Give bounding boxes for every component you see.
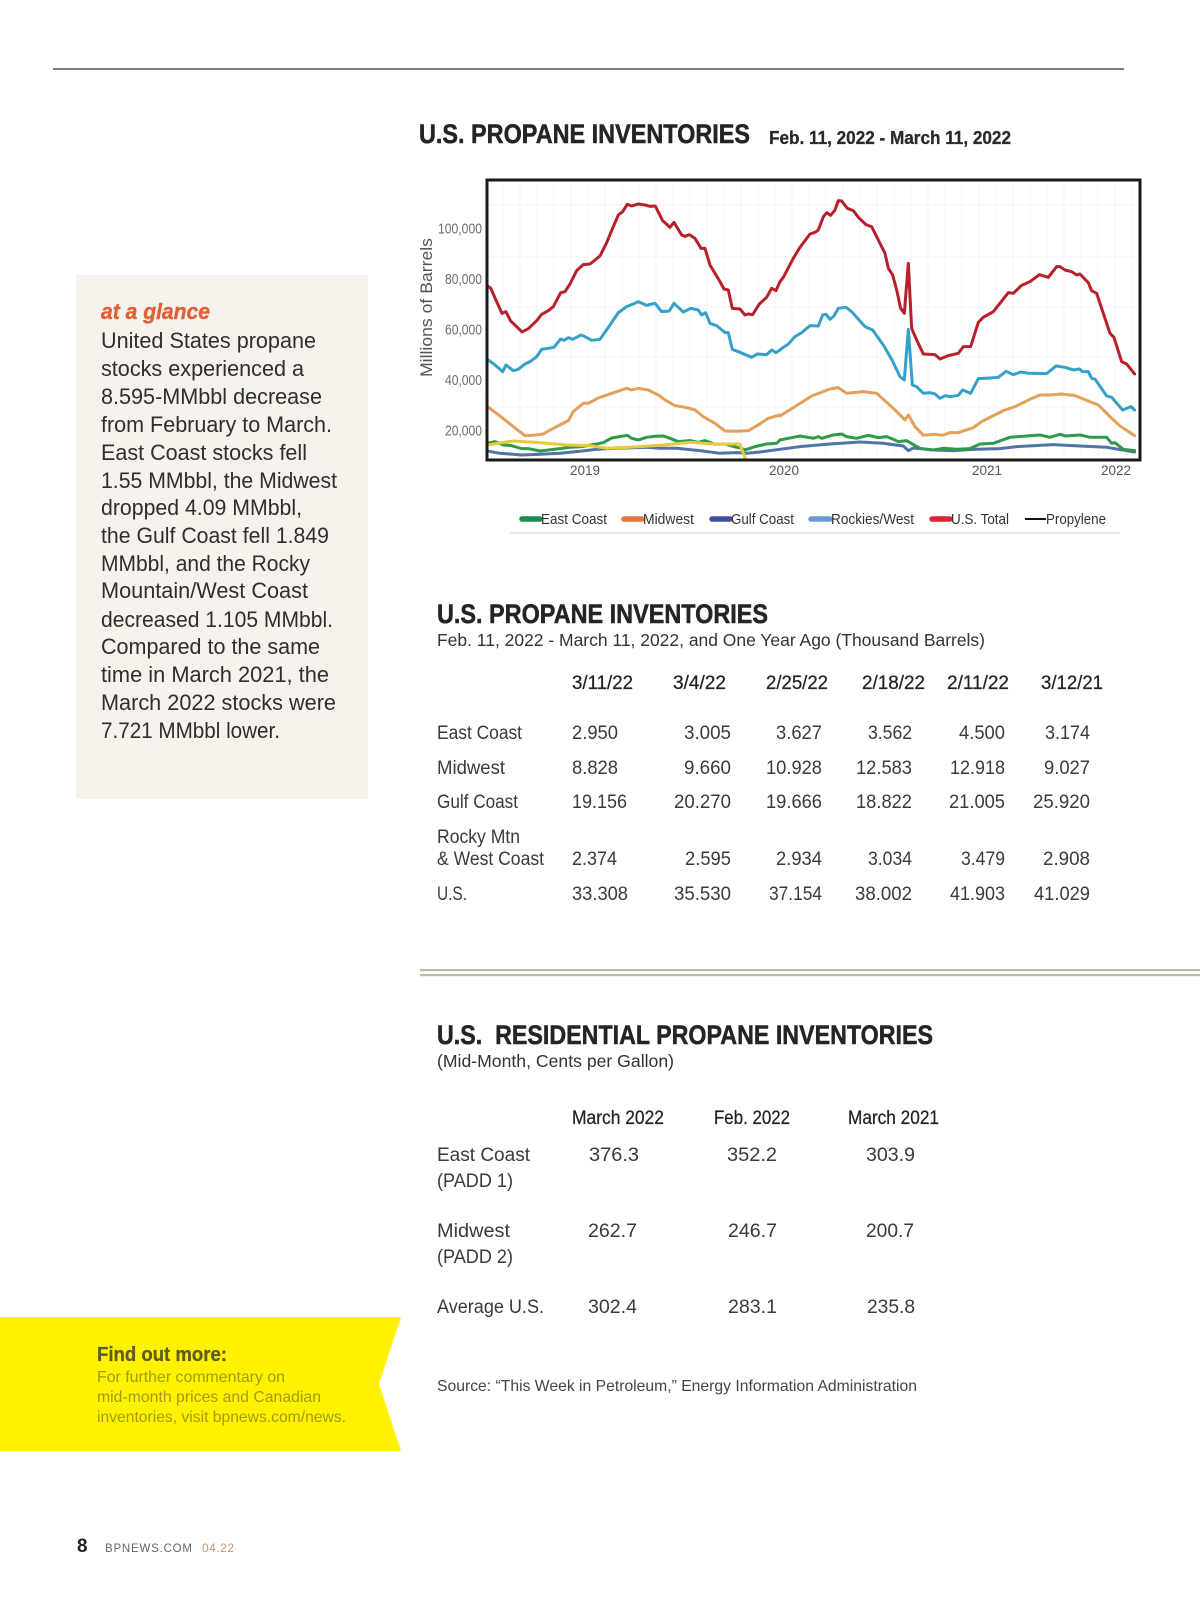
row: East Coast: 2.950: [572, 723, 618, 744]
row: Rocky Mtn and West Coast: [437, 827, 1090, 870]
heading: residential table: (Mid-Month, Cents per Gallon): [437, 1051, 674, 1071]
line: East Coast (green): [487, 434, 1135, 451]
line: U.S. total (red): [487, 201, 1135, 374]
line: Rockies/West (blue): [487, 302, 1135, 410]
row: Midwest: 9.660: [684, 758, 731, 779]
text block: sidebar summary: decreased 1.105 MMbbl.: [101, 607, 333, 632]
table header row: [572, 673, 1103, 694]
row: U.S.: U.S.: [437, 884, 467, 905]
heading: inventories table: [437, 599, 985, 650]
row: Midwest: 12.918: [950, 758, 1005, 779]
text block: sidebar summary: Compared to the same: [101, 634, 320, 659]
x axis labels: 2021: [972, 463, 1002, 478]
text block: sidebar summary: from February to March.: [101, 412, 332, 437]
chart legend: East Coast: [541, 512, 607, 528]
table header row: 3/11/22: [572, 673, 633, 694]
row: East Coast: East Coast: [437, 723, 523, 744]
row: U.S.: 38.002: [855, 884, 912, 905]
row: Rocky Mtn and West Coast: 2.908: [1043, 849, 1090, 870]
x axis labels: 2020: [769, 463, 799, 478]
chart frame: [487, 180, 1140, 460]
y axis labels: 80,000: [445, 271, 482, 288]
row: Gulf Coast: 25.920: [1033, 792, 1090, 813]
text block: sidebar summary: [101, 328, 337, 743]
line chart: propane inventories by region: [418, 180, 1140, 533]
callout: find out more banner: mid-month prices and Canadian: [97, 1389, 321, 1406]
chart legend: [510, 512, 1120, 533]
row: Rocky Mtn and West Coast: & West Coast: [437, 849, 545, 870]
row: Rocky Mtn and West Coast: 3.479: [961, 849, 1005, 870]
row: East Coast PADD 1: 303.9: [866, 1145, 915, 1166]
text block: sidebar summary: stocks experienced a: [101, 356, 305, 381]
row: Gulf Coast: 20.270: [674, 792, 731, 813]
table header row: 3/12/21: [1041, 673, 1103, 694]
row: Midwest: 10.928: [766, 758, 822, 779]
callout: find out more banner: For further commentary on: [97, 1369, 285, 1386]
table header row: 3/4/22: [673, 673, 726, 694]
row: U.S.: 35.530: [674, 884, 731, 905]
text block: sidebar summary: 8.595-MMbbl decrease: [101, 384, 322, 409]
row: East Coast PADD 1: 352.2: [727, 1145, 777, 1166]
heading: chart title: U.S. PROPANE INVENTORIES: [419, 119, 750, 149]
row: Average U.S.: 283.1: [728, 1297, 777, 1318]
row: Average U.S.: [437, 1297, 915, 1318]
row: Average U.S.: Average U.S.: [437, 1297, 544, 1318]
row: Midwest: Midwest: [437, 758, 506, 779]
row: Midwest PADD 2: 200.7: [866, 1221, 914, 1242]
chart legend: Midwest: [643, 512, 694, 528]
row: U.S.: [437, 884, 1090, 905]
x axis labels: 2019: [570, 463, 600, 478]
row: Midwest: 9.027: [1044, 758, 1090, 779]
residential header row: [572, 1108, 939, 1129]
y axis labels: 60,000: [445, 322, 482, 338]
row: Midwest PADD 2: (PADD 2): [437, 1247, 513, 1268]
row: East Coast: 3.174: [1045, 723, 1090, 744]
row: Gulf Coast: 18.822: [856, 792, 912, 813]
heading: chart title: [419, 119, 1011, 149]
residential header row: Feb. 2022: [714, 1108, 790, 1129]
row: U.S.: 41.903: [950, 884, 1005, 905]
chart legend: Gulf Coast: [731, 512, 794, 528]
row: East Coast PADD 1: 376.3: [589, 1145, 639, 1166]
callout: find out more banner: Find out more:: [97, 1344, 227, 1366]
row: Midwest PADD 2: Midwest: [437, 1221, 511, 1242]
y axis labels: [438, 220, 482, 440]
table: propane inventories: [437, 673, 1103, 905]
row: U.S.: 41.029: [1034, 884, 1090, 905]
row: Gulf Coast: 21.005: [949, 792, 1005, 813]
chart legend: U.S. Total: [951, 512, 1009, 528]
callout: find out more banner: [0, 1317, 401, 1451]
text block: sidebar summary: Mountain/West Coast: [101, 578, 308, 603]
row: East Coast: 3.562: [868, 723, 912, 744]
text block: sidebar summary: time in March 2021, the: [101, 662, 329, 687]
heading: inventories table: U.S. PROPANE INVENTORIES: [437, 599, 768, 629]
line: Midwest (orange): [487, 388, 1135, 436]
row: East Coast PADD 1: (PADD 1): [437, 1171, 513, 1192]
row: Midwest: [437, 758, 1090, 779]
chart lines: [487, 201, 1135, 462]
row: East Coast: 3.005: [684, 723, 731, 744]
row: Rocky Mtn and West Coast: 3.034: [868, 849, 912, 870]
row: U.S.: 37.154: [769, 884, 822, 905]
text block: sidebar summary: dropped 4.09 MMbbl,: [101, 495, 302, 520]
row: East Coast: 3.627: [776, 723, 822, 744]
callout: find out more banner: inventories, visit bpnews.com/news.: [97, 1409, 346, 1426]
row: Average U.S.: 302.4: [588, 1297, 637, 1318]
x axis labels: 2022: [1101, 463, 1131, 478]
text block: sidebar summary: 1.55 MMbbl, the Midwest: [101, 468, 337, 493]
row: Midwest PADD 2: 262.7: [588, 1221, 637, 1242]
residential header row: March 2021: [848, 1108, 939, 1129]
row: Average U.S.: 235.8: [867, 1297, 915, 1318]
row: Rocky Mtn and West Coast: Rocky Mtn: [437, 827, 520, 848]
line: Gulf Coast (steel blue): [487, 442, 1135, 455]
y axis labels: 100,000: [438, 220, 482, 238]
text block: sidebar summary: MMbbl, and the Rocky: [101, 551, 310, 576]
y axis labels: 40,000: [445, 372, 482, 389]
row: East Coast: 4.500: [959, 723, 1005, 744]
heading: residential table: [437, 1020, 933, 1071]
chart legend: Rockies/West: [831, 512, 914, 528]
x axis labels: [570, 463, 1131, 478]
footer: 04.22: [202, 1541, 234, 1555]
residential header row: March 2022: [572, 1108, 664, 1129]
heading: chart title: Feb. 11, 2022 - March 11, 2022: [769, 128, 1011, 148]
row: Gulf Coast: 19.156: [572, 792, 627, 813]
row: East Coast: [437, 723, 1090, 744]
source note: Source: “This Week in Petroleum,” Energy Information Administration: [437, 1378, 917, 1395]
footer: 8: [77, 1536, 88, 1557]
text block: sidebar summary: United States propane: [101, 328, 316, 353]
table header row: 2/11/22: [947, 673, 1009, 694]
heading: at a glance: at a glance: [101, 299, 210, 324]
row: Midwest PADD 2: [437, 1221, 914, 1268]
row: Midwest PADD 2: 246.7: [728, 1221, 777, 1242]
row: East Coast PADD 1: [437, 1145, 915, 1192]
table header row: 2/18/22: [862, 673, 925, 694]
text block: sidebar summary: the Gulf Coast fell 1.849: [101, 523, 329, 548]
row: Gulf Coast: Gulf Coast: [437, 792, 519, 813]
line: propylene (yellow): [487, 441, 747, 462]
row: Midwest: 12.583: [856, 758, 912, 779]
row: Rocky Mtn and West Coast: 2.595: [685, 849, 731, 870]
y axis title: Millions of Barrels: [418, 238, 436, 377]
row: Gulf Coast: [437, 792, 1090, 813]
footer: BPNEWS.COM: [105, 1543, 192, 1555]
table header row: 2/25/22: [766, 673, 828, 694]
chart legend: Propylene: [1046, 512, 1106, 528]
row: Midwest: 8.828: [572, 758, 618, 779]
text block: sidebar summary: East Coast stocks fell: [101, 440, 307, 465]
text block: sidebar summary: 7.721 MMbbl lower.: [101, 718, 280, 743]
row: Rocky Mtn and West Coast: 2.934: [776, 849, 822, 870]
heading: inventories table: Feb. 11, 2022 - March 11, 2022, and One Year Ago (Thousand Barrels): [437, 630, 985, 650]
heading: residential table: U.S. RESIDENTIAL PROPANE INVENTORIES: [437, 1020, 933, 1050]
footer: [77, 1536, 234, 1557]
row: U.S.: 33.308: [572, 884, 628, 905]
row: Gulf Coast: 19.666: [766, 792, 822, 813]
y axis labels: 20,000: [445, 422, 482, 440]
text block: sidebar summary: March 2022 stocks were: [101, 690, 336, 715]
row: East Coast PADD 1: East Coast: [437, 1145, 531, 1166]
table: residential propane: [437, 1108, 939, 1318]
row: Rocky Mtn and West Coast: 2.374: [572, 849, 617, 870]
panel: at a glance sidebar: [76, 275, 368, 799]
